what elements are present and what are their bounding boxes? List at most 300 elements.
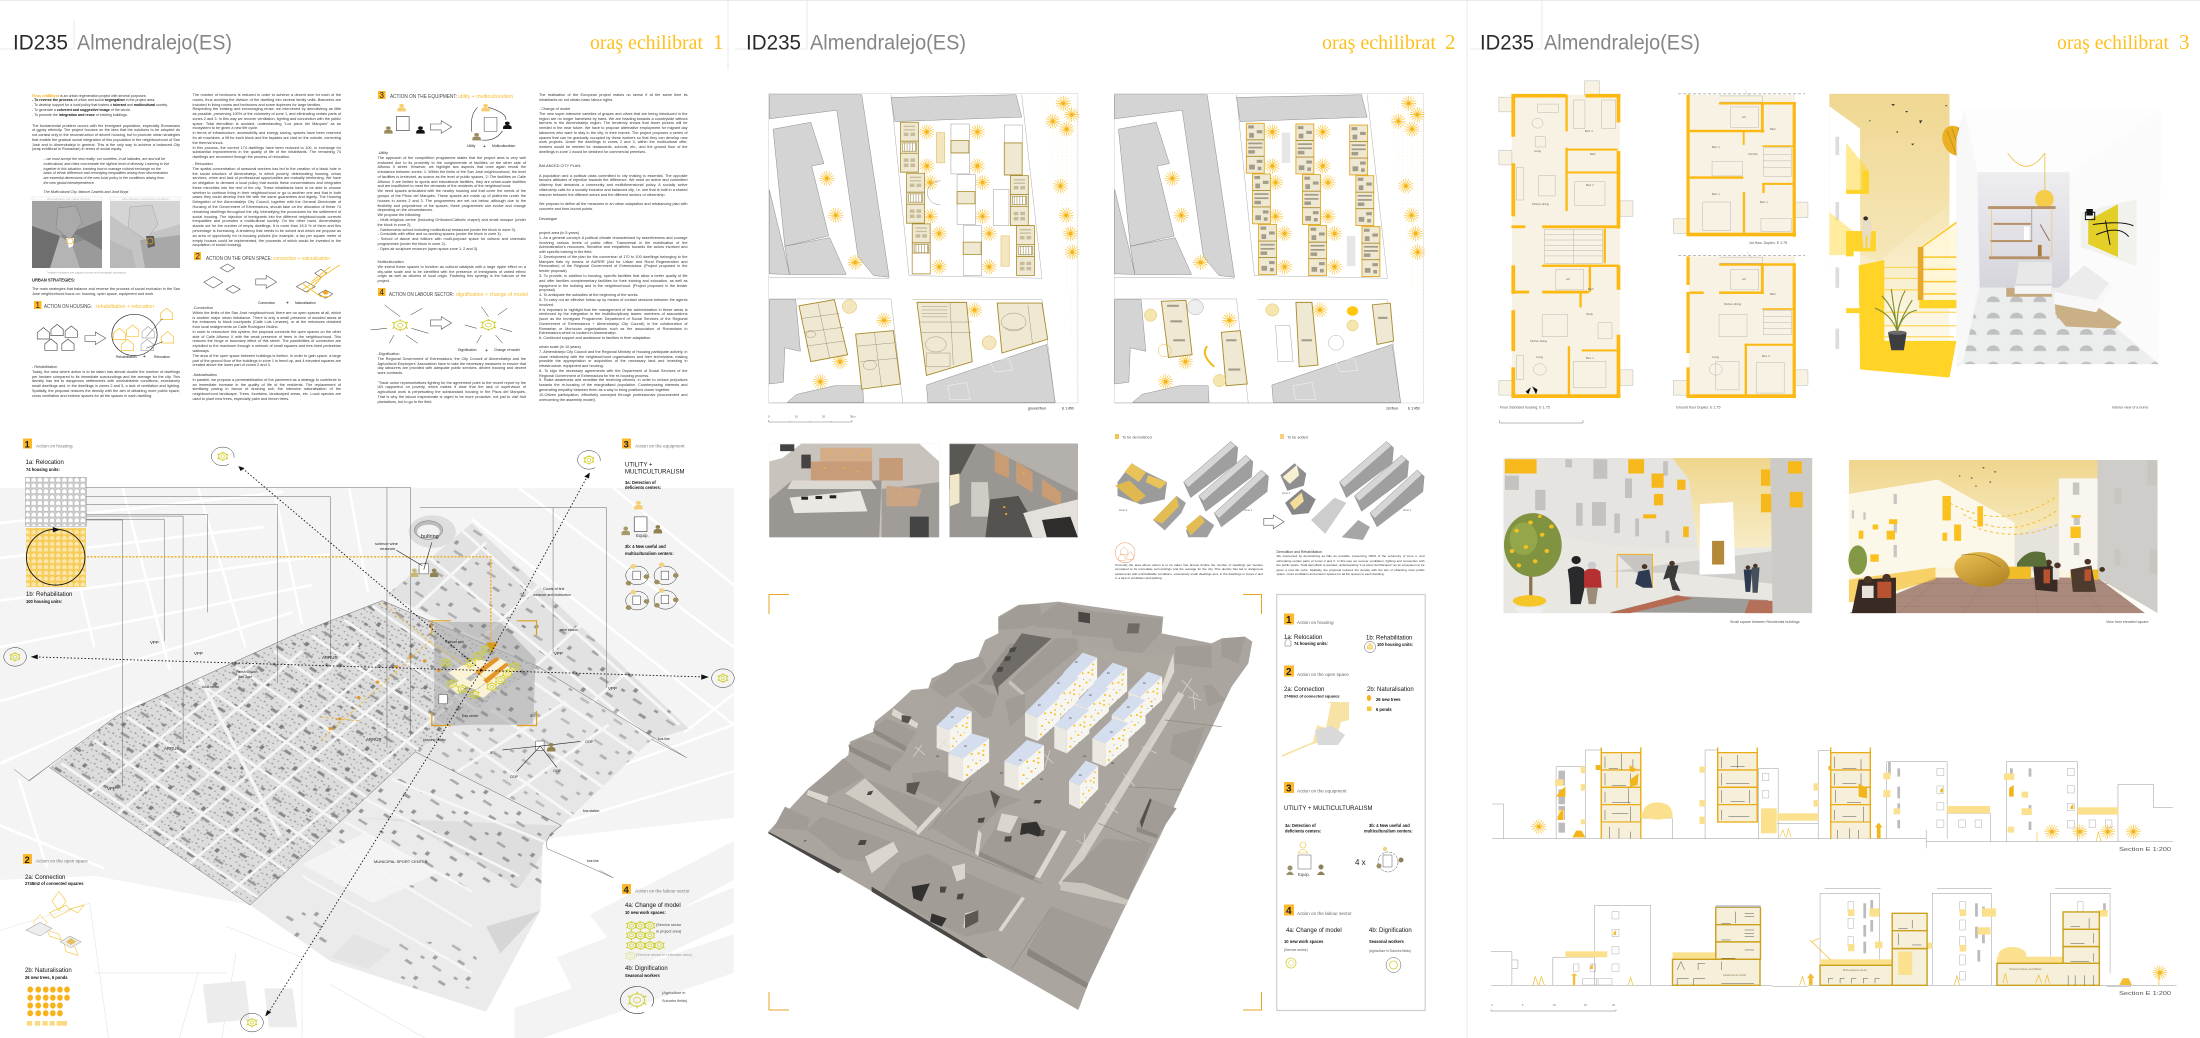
isometric zone labels [1119,491,1412,512]
scale bar [1500,420,1583,423]
render: elevated square [1848,460,2158,613]
legend block 1 housing: Action on housing [36,444,73,448]
section 2 labels: Gastronomic school [1723,973,1746,977]
plant [1875,289,1917,350]
plan room labels: Kitchen-dining [1532,202,1550,206]
legend block 3 equipment: Action on the equipment [635,444,685,448]
diagram: action on open space [204,264,340,298]
text: balanced city plan: Decalogue [539,217,557,221]
legend block 2 open space: 2748m2 of connected squares [25,881,84,886]
map labels: museum [380,546,396,551]
text: connection: In order to restructure this system, the proposal connects the open spaces on the other side of Calle Alfonso X with the weak presence of trees in the neighbourhood. This reduces the hinge or boundary effect of this street. The possibilities of connection are exploited to the maximum through a network of small squares and tree-lined pedestrian walkways. [192,330,341,353]
legend block 3 equipment: 3b: 4 New useful and [625,544,666,549]
map labels: IES [530,714,536,718]
map labels: San José [238,675,252,679]
title: ID235 [746,32,801,54]
map labels: ARRUR [322,655,338,660]
text: multiculturalism: Multiculturalism [378,260,404,264]
diagram labels housing: Relocation [154,355,170,359]
legend block 1 housing: 74 housing units: [26,467,60,472]
text: utility: - Gastronomic school including multicultural restaurant (under the block in zone 3). [378,228,516,232]
floor plan ground floor duplex [1673,252,1808,398]
section scale bar: 10 [1553,1003,1556,1007]
text: balanced city plan: A population and a political class committed to city making is essential. The opposite favours attitudes of rejection towards the difference. We need an active and committed citizenry that demands a community and multidimensional policy. A socially active citizenship calls for a socially inclusive and balanced city, i.e. one that is built in a shared manner between the different actors and the different sectors of citizenship. [539,174,688,197]
diagram labels housing: Rehabilitation [116,355,137,359]
main cardboard model photo [768,602,1252,1010]
diagram labels equipment [467,144,516,150]
bunting [1945,496,2057,534]
scale bar: 0 [768,414,770,418]
heading: action on the equipment: ACTION ON THE EQUIPMENT: [390,94,457,100]
title: Almendralejo(ES) [1544,32,1700,54]
bullring [409,515,456,548]
text: utility: -Utility [378,151,388,155]
floor plan standard housing [1499,81,1633,398]
text: naturalisation: -Naturalisation [192,373,217,377]
map labels: Adult center [202,685,220,689]
text: rehabilitation continued: The number of bedrooms is reduced in order to achieve a decent size for each of the rooms, thus avoiding the division of the dwelling into several family units. Balconies are included in living rooms and bedrooms and some duplexes for large families. [192,93,341,107]
legend block 3 equipment: 3a: Detection of [625,480,656,485]
text: rehabilitation continued [192,93,341,159]
legend action 3: multiculturalism centers: [1364,828,1413,834]
heading: action on labour sector: ACTION ON LABOUR SECTOR: [389,292,454,298]
text: demolition and rehabilitation: Demolition and Rehabilitation [1276,550,1322,554]
section scale bar: 5 [1522,1003,1524,1007]
section scale bar: 0 [1491,1003,1493,1007]
legend block 1 housing [23,438,73,604]
project name heading: oraş echilibrat [1322,33,1437,54]
heading: action on housing: ACTION ON HOUSING: [44,304,92,310]
model labels: 1b [1143,681,1147,685]
isometric zone labels: Zone 1 [1244,508,1253,512]
2a connection diagram [26,891,84,955]
map labels: bus station [583,809,600,813]
plan room labels: Bed. 1 [1586,356,1594,360]
section scale bar [1491,1003,1616,1011]
panel: legend summary [1277,594,1425,1010]
map labels: ARRUR [164,746,180,751]
model labels: 1b [964,744,968,748]
model labels: 1b [1019,758,1023,762]
text: utility: - Multi-religious centre (including Orthodox/Catholic chapel) and small mosque (under the block in zone 2). [378,218,526,227]
panel: sheet 2 plans and model [735,0,1470,1038]
road arrows [14,739,687,878]
scale bar: 20 [822,414,826,418]
model labels: 3b [1000,771,1004,775]
people [1852,563,2096,613]
plan captions [1500,241,2148,410]
room shell [1956,109,2161,367]
legend block 2 open space [23,854,88,980]
left tree [1848,545,1867,575]
isometric demolition diagram [1115,442,1424,540]
plan: ground floor [768,94,1080,403]
heading: action on housing: rehabilitation + relocation [96,304,154,310]
maps of per capita income [32,197,180,268]
legend block 4 labour: (Service sector in reflection area) [636,953,692,957]
plan room labels: Bed. 1 [1712,192,1720,196]
plan room labels: Bath [1770,127,1776,131]
section scale bar: 15 [1584,1003,1587,1007]
legend action 2: 2b: Naturalisation [1367,687,1414,693]
map labels: science wine [375,541,399,546]
legend block 2 open space: Action on the open space [36,858,88,864]
project name heading: oraş echilibrat [2057,33,2170,54]
plan captions: 1st floor [1386,406,1399,410]
legend block 4 labour: (Agriculture in [662,991,685,995]
legend action 3: 3b: 4 New useful and [1369,823,1410,828]
model labels: 2a [936,754,940,758]
section 2 [1491,888,2177,987]
map labels: CEIP [585,740,594,744]
section 2 labels: Multi-religious centre [1843,968,1867,972]
plan room labels: Bed. 1 [1760,200,1768,204]
text: decalogue project area: project area (in 5 years) [539,231,579,235]
legend action 4: (Agriculture in Suburbs fields) [1369,949,1411,953]
text: urban strategies: The main strategies that balance and reverse the process of social exclusion in the San José neighborhood focus on: housing, open space, equipment and work. [32,287,180,296]
title: Almendralejo(ES) [77,32,232,54]
white project buildings [937,653,1162,809]
legend block 2 open space: 2b: Naturalisation [25,968,72,974]
model labels: 1b [1057,681,1061,685]
text: dignification: "Trade union representatives fighting for the agreement point to the recent report by the UN rapporteur on poverty, which makes it clear that the lack of supervision of agricultural work is perpetuating the substandard housing in the Pisos del Marqués. That is why the labour inspectorate is urged to be more proactive, not just to visit fruit plantations, but to go to the field. [378,381,526,404]
legend action 3: Action on the equipment [1297,788,1347,794]
end-point gear rings [4,447,734,1032]
model labels: 1b [1110,730,1114,734]
section 2 labels: School of dance and folklore [2009,967,2042,971]
text: decalogue project area: It is important to highlight that the management of the administration in these areas is reinforced by the integration in the multidisciplinary teams: members of associations (such as the Immigrant Programme: Department of Social Services of the Regional Government of Extremadura + Almendralejo City Council) in the collaboration of Romanian or Moroccan organisations such as the association of Romanians in Extremadura which is located in Almendralejo. [539,308,688,335]
lemon tree [1504,513,1562,613]
radial dotted arrows [33,467,708,1016]
diagram labels open space: + [286,300,289,306]
legend block 4 labour: 10 new work spaces: [625,910,666,915]
legend action 1: 74 housing units: [1294,641,1328,646]
text: decalogue urban scale: urban scale (in 10 years) [539,345,581,349]
plan room labels: Living [1712,355,1720,359]
text: utility: - Open-air sculpture museum (open space zone 1, 2 and 3). [378,247,478,251]
legend action 4: 4 [1286,906,1292,917]
urban map [0,447,734,1038]
legend action 4: (Service sector) [1284,948,1308,952]
heading: action on the open space [194,252,330,262]
model labels: 4a [1111,761,1115,765]
model photo left [769,444,939,537]
legend block 4 labour: Seasonal workers [625,973,661,978]
scale bar: 10 [795,414,799,418]
plan captions: E 1:450 [1062,406,1074,410]
text: quote: ...we must accept the new reality: our societies, in all latitudes, are and will be multicultural, and cities concentrate the highest level of diversity. Learning to live together in this situation, knowing how to manage cultural exchange on the basis of ethnic difference and remedying inequalities arising from discrimination are essential dimensions of the new local policy in the conditions arising from the new global interdependence. [44,157,169,185]
plan room labels [1530,115,1776,360]
text: connection: Within the limits of the San José neighbourhood, there are no open spaces at all, which is another major urban imbalance. There is only a small presence of wooded areas at the entrances to block courtyards (Calle Luis Lenares), or at the entrances obtained from local realignments on Calle Rodríguez Molino. [192,311,341,329]
plan captions: Interior view of a home [2112,406,2148,410]
heading: action on the open space: ACTION ON THE OPEN SPACE: [206,256,272,262]
legend block 3 equipment: MULTICULTURALISM [625,470,684,476]
legend block 1 housing: 100 housing units: [26,599,62,604]
model labels: 1b [1075,660,1079,664]
lit road [1058,692,1184,890]
scale bar: 30m [850,414,856,418]
model labels: 4a [1150,704,1154,708]
map labels: Day center [462,714,479,718]
map labels: Housing center [423,738,447,742]
legend action 3: UTILITY + MULTICULTURALISM [1284,806,1373,812]
heading: action on labour sector: 4 [380,288,384,297]
plan room labels: Bath [1590,152,1596,156]
legend action 4 [1284,904,1412,972]
text: relocation: - Relocation [192,162,213,166]
render captions: View from elevated square [2106,620,2148,624]
legend block 2 open space: 2a: Connection [25,875,65,881]
map labels [107,534,670,864]
text: connection: -Connection [192,306,213,310]
map labels: bus line [658,737,670,741]
text: decalogue urban scale [539,345,688,402]
model labels: 2a [1083,754,1087,758]
model labels: 1b [1079,773,1083,777]
elderly couple [1568,556,1602,604]
render: small square [1504,458,1812,613]
render captions [1730,620,2148,624]
text: utility [378,151,526,251]
project name heading: 2 [1445,30,1456,54]
map labels: VPP [150,640,159,645]
text: multiculturalism: We intend these spaces to function as cultural catalysts with a large ripple effect on a city-wide scale and to be identified with the presence of immigrants of varied ethnic origin as well as citizens of local origin. Fostering this synergy is the fulcrum of the project. [378,265,526,283]
map labels: VPP [107,786,116,791]
model base [768,602,1252,1010]
legend block 4 labour: 4 [624,885,630,896]
map labels: VPP [194,651,203,656]
text: utility: The approach of the competition programme states that the project area is very well endowed due to its proximity to the conglomerate of facilities on the other side of Alfonso X street. However, we highlight two aspects that once again reveal the imbalance between zones: 1: Within the limits of the San José neighbourhood, the level of facilities is irrelevant, as scarce as the level of public spaces. 2: The facilities on Calle Alfonso X are limited to sports and educational facilities, they are urban-scale facilities and are insufficient to meet the demands of the residents of the neighbourhood. [378,156,526,188]
heading: action on the equipment: utility + multiculturalism [458,94,513,100]
legend action 1: 1a: Relocation [1284,635,1322,641]
diagram: action on equipment [384,104,512,140]
heading: action on the equipment: 3 [380,91,384,100]
text: rehabilitation continued: In this process, the current 174 dwellings have been reduced to 100, in exchange for substantial improvements in the quality of life of the inhabitants. The remaining 74 dwellings are recovered through the process of relocation. [192,146,341,159]
text: balanced city plan: BALANCED CITY PLAN: [539,164,581,168]
map labels: bus line [587,859,599,863]
panel: sheet 1 urban strategies [0,0,735,1038]
diagram labels housing: + [143,354,146,360]
text: utility: We propose the following: [378,213,421,217]
text: rehabilitation: - Rehabilitation [32,365,57,369]
legend block 4 labour [622,884,692,1003]
equipment nodes [419,564,544,750]
text: naturalisation: In parallel, we propose a permeabilisation of the pavement as a strategy to contribute to an immediate increase in the quality of life of the residents. The replacement of sterilising paving in favour of draining soil, the intensive naturalisation of the neighbourhood landscape. Trees, fountains, landscaped areas, etc. Local species are used to plant new trees, especially palm and lemon trees. [192,378,341,401]
model labels: 1b [1127,705,1131,709]
legend block 2 open space: 2 [24,855,30,866]
page frame lines [735,0,1470,1038]
legend block 4 labour: 4a: Change of model [625,903,681,909]
render captions: Small square between Residential buildings [1730,620,1800,624]
diagram labels labour: Change of model [494,348,520,352]
floor plan first floor duplex [1673,90,1808,237]
legend action 4: 4a: Change of model [1286,928,1342,934]
text: project purposes: - To generate a coherent and suggestive image of the whole. [32,108,131,112]
text: decalogue urban scale: 8- To sign the necessary agreements with the Department of Social Services of the Regional Government of Extremadura for the re-housing process. [539,369,688,378]
sofas [2006,262,2122,329]
model labels: 1b [1038,703,1042,707]
yellow dotted link [59,557,491,643]
legend action 1 [1284,614,1413,652]
plan room labels: Living [1534,149,1542,153]
section 2 labels [1723,967,2042,977]
section 1 [1492,747,2173,848]
isometric zone labels: Zone 1 [1403,508,1412,512]
legend block 4 labour: in project area) [656,930,682,934]
legend action 3: deficients centers: [1285,828,1321,834]
legend action 3: 4 x [1355,858,1366,867]
isometric demolition diagram legend [1115,434,1308,440]
text: fundamental problem: The fundamental problem occurs with the immigrant population, especially Romanians of gypsy ethnicity. The project focuses on the idea that the solutions to be adopted do not consist only in the reconstruction of decent housing, but to promote urban strategies that enable the gradual social integration of this population in the neighbourhood of San José and in Almendralejo in general. This is the only way to achieve a balanced City (oraş echilibrat in Romanian) in terms of social equity. [32,124,180,151]
diagram labels labour: Dignification [458,348,477,352]
text: rehabilitation continued: Respecting the existing and encouraging reuse, we intervened by demolishing as little as possible, preserving 100% of the volumetry of zone 1, and eliminating certain parts of zones 2 and 3. In this way we recover ventilation, lighting and connection with the public space. Total demolition is avoided, understanding "Los pisos del Marqués" as an ecosystem to be given a new life cycle. [192,107,341,130]
diagram labels labour: + [485,348,488,354]
legend action 3: 3a: Detection of [1285,823,1316,828]
plan room labels: Bath [1770,292,1776,296]
map labels: Parish Church [236,670,258,674]
project area [434,622,536,727]
map caption: *relation between per capita income and immigrant population [47,270,127,274]
maps of per capita income: Almendralejo: per capita income [47,197,90,201]
plan room labels: Lift [1566,277,1570,281]
map labels: CEIP [510,775,519,779]
diagram labels equipment: Multiculturalism [492,144,516,148]
plan room labels: Lift [1742,115,1746,119]
legend action 2: 2 [1286,667,1292,678]
project name heading: 3 [2179,30,2190,54]
text: change of model: - Change of model [539,107,570,111]
legend block 3 equipment: deficients centers: [625,485,661,490]
legend block 3 equipment: Equip. [636,533,649,538]
legend block 1 housing: 1b: Rehabilitation [26,592,72,598]
diagram: action on labour sector [370,305,512,343]
map labels: VPP [608,686,617,691]
legend block 1 housing: 1 [24,440,30,450]
shelves [1988,206,2056,259]
legend action 2: 2748m2 of connected squares [1284,694,1340,698]
text: rehabilitation: Today, the area where action is to be taken has almost double the number of dwellings per hectare compared to its immediate surroundings and the average for the city. This density has led to dangerous settlements with uninhabitable conditions, excessively small dwellings and, in the dwellings in zones 2 and 3, a lack of ventilation and lighting. Spatially, the proposal reduces the density with the aim of obtaining more public space, cross ventilation and exterior spaces for all the spaces in each dwelling. [32,370,180,398]
legend action 4: Seasonal workers [1369,939,1405,944]
plan captions [1028,406,1420,410]
text: utility: - School of dance and folklore with multi-purpose space for cultural and cinematic programmes (under the block in zone 2). [378,237,526,246]
plan room labels: Bed. 3 [1762,354,1770,358]
1b housing grid [26,527,86,587]
model labels: 1b [951,715,955,719]
title [1480,32,1700,54]
text: decalogue project area: 5- To carry out an effective follow-up by means of contact sessions between the agents involved. [539,298,688,307]
plan room labels: Lift [1742,277,1746,281]
model lit walls [807,653,1174,988]
legend action 3: Equip. [1298,872,1310,877]
maps of per capita income: Almendralejo: immigrant population [122,197,169,201]
diagram: action on housing [37,308,174,356]
legend action 2 [1282,666,1414,757]
legend block 3 equipment: UTILITY + [625,462,653,468]
3a icon [621,501,662,535]
4a gears [625,921,664,961]
legend block 1 housing: 1a: Relocation [26,460,64,466]
text: project purposes [32,92,168,117]
title: ID235 [1480,32,1534,54]
project name heading: oraş echilibrat [590,33,704,54]
text: decalogue project area [539,231,688,340]
balcony figure [1861,216,1872,248]
legend action 4: Action on the labour sector [1297,911,1352,916]
map labels: Railroad park [445,640,464,644]
isometric zone labels: Zone 3 [1282,491,1291,495]
text: quote: The Multicultural City. Manuel Castells and Jordi Borja [44,190,128,194]
title [13,32,232,54]
isometric zone labels: Zone 3 [1119,508,1128,512]
lamp [2008,153,2054,209]
isometric demolition diagram legend: To be demolished [1122,436,1152,440]
model photo corners [769,594,1262,1010]
legend block 3 equipment [622,438,685,556]
4b gear icon [621,986,657,1016]
plan room labels: Bed. 2 [1586,183,1594,187]
2b trees and ponds [27,986,70,1026]
model blocks tops [773,603,1245,983]
legend action 3 [1284,782,1413,877]
legend action 2: 26 new trees [1376,697,1401,702]
plan captions: Floor Standard housing. E 1:75 [1500,406,1550,410]
north-east zone [387,523,689,740]
text: change of model: The new super-intensive varieties of grapes and olives that are being introduced in the region are no longer harvested by hand. We are heading towards a countryside without farmers in the Almendralejo region. The tendency shows that fewer pickers will be needed in the near future. We have to propose alternative employment for migrant day labourers who want to stay in the city, in their homes. The project proposes a series of spaces that can be gradually occupied by these workers so that they can develop new work projects. Under the dwellings in zones 2 and 3, within the multicultural offer, workers would be needed for restaurants, schools, etc., and the ground floor of the dwellings in zone 1 would be destined for commercial premises. [539,112,688,154]
legend block 4 labour: (Service sector [656,923,682,927]
1a housing grid [25,477,86,526]
text: dignification [378,352,526,404]
project name heading: 1 [713,30,724,54]
map labels: Courts of first [543,587,564,591]
diagram labels open space [258,300,316,306]
legend block 4 labour: Suburbs fields) [662,999,688,1003]
diagram labels equipment: + [483,144,486,150]
page frame lines [0,0,735,70]
plan captions: Ground floor Duplex. E 1:75 [1676,406,1721,410]
title: ID235 [13,32,68,54]
text: balanced city plan: We propose to define all the measures in an urban adaptation and rebalancing plan with concrete and time-bound points. [539,202,688,211]
southern sports zone [250,752,562,1012]
plan captions: E 1:450 [1408,406,1420,410]
legend block 4 labour: 4b: Dignification [625,966,668,972]
legend action 1: 100 housing units: [1377,642,1413,647]
model dark shadows and voids [768,612,1152,958]
legend action 2: Action on the open space [1297,672,1349,677]
diagram labels housing [116,354,170,360]
legend action 2: 2a: Connection [1284,687,1324,693]
map labels: CEIP [553,769,562,773]
heading: action on the open space: 2 [196,252,200,261]
model labels: 2a [1040,777,1044,781]
plan captions: 1st floor. Duplex. E 1:75 [1749,241,1787,245]
text: balanced city plan [539,164,688,221]
text: project purposes: - To develop support for a local policy that fosters a tolerant and multicultural society. [32,103,168,107]
diagram labels labour [458,348,520,354]
text: decalogue project area: 2- Development of the plan for the conversion of 170 to 100 dwellings belonging to the Marqués flats by means of AURRR (Aid for Urban and Rural Regeneration and Renovation) of the Regional Government of Extremadura. (Project proposed in the tender proposal) [539,255,688,273]
legend action 2: 6 ponds [1376,707,1392,712]
map labels: wine station [560,628,578,632]
plan room labels: Living [1536,355,1544,359]
legend action 3: 3 [1286,784,1292,794]
text: project purposes: - To reverse the process of urban and social segregation in the project area. [32,98,155,102]
plan captions: ground floor [1028,406,1047,410]
map labels: bullring [421,534,439,540]
render: interior view [1829,94,2161,380]
model labels: 1b [1107,671,1111,675]
text: decalogue project area: 4- To anticipate the subsidies at the beginning of the works. [539,293,639,297]
legend block 2 open space: 26 new trees, 6 ponds [25,975,68,980]
heading: action on the open space: connection + naturalisation [273,256,330,262]
